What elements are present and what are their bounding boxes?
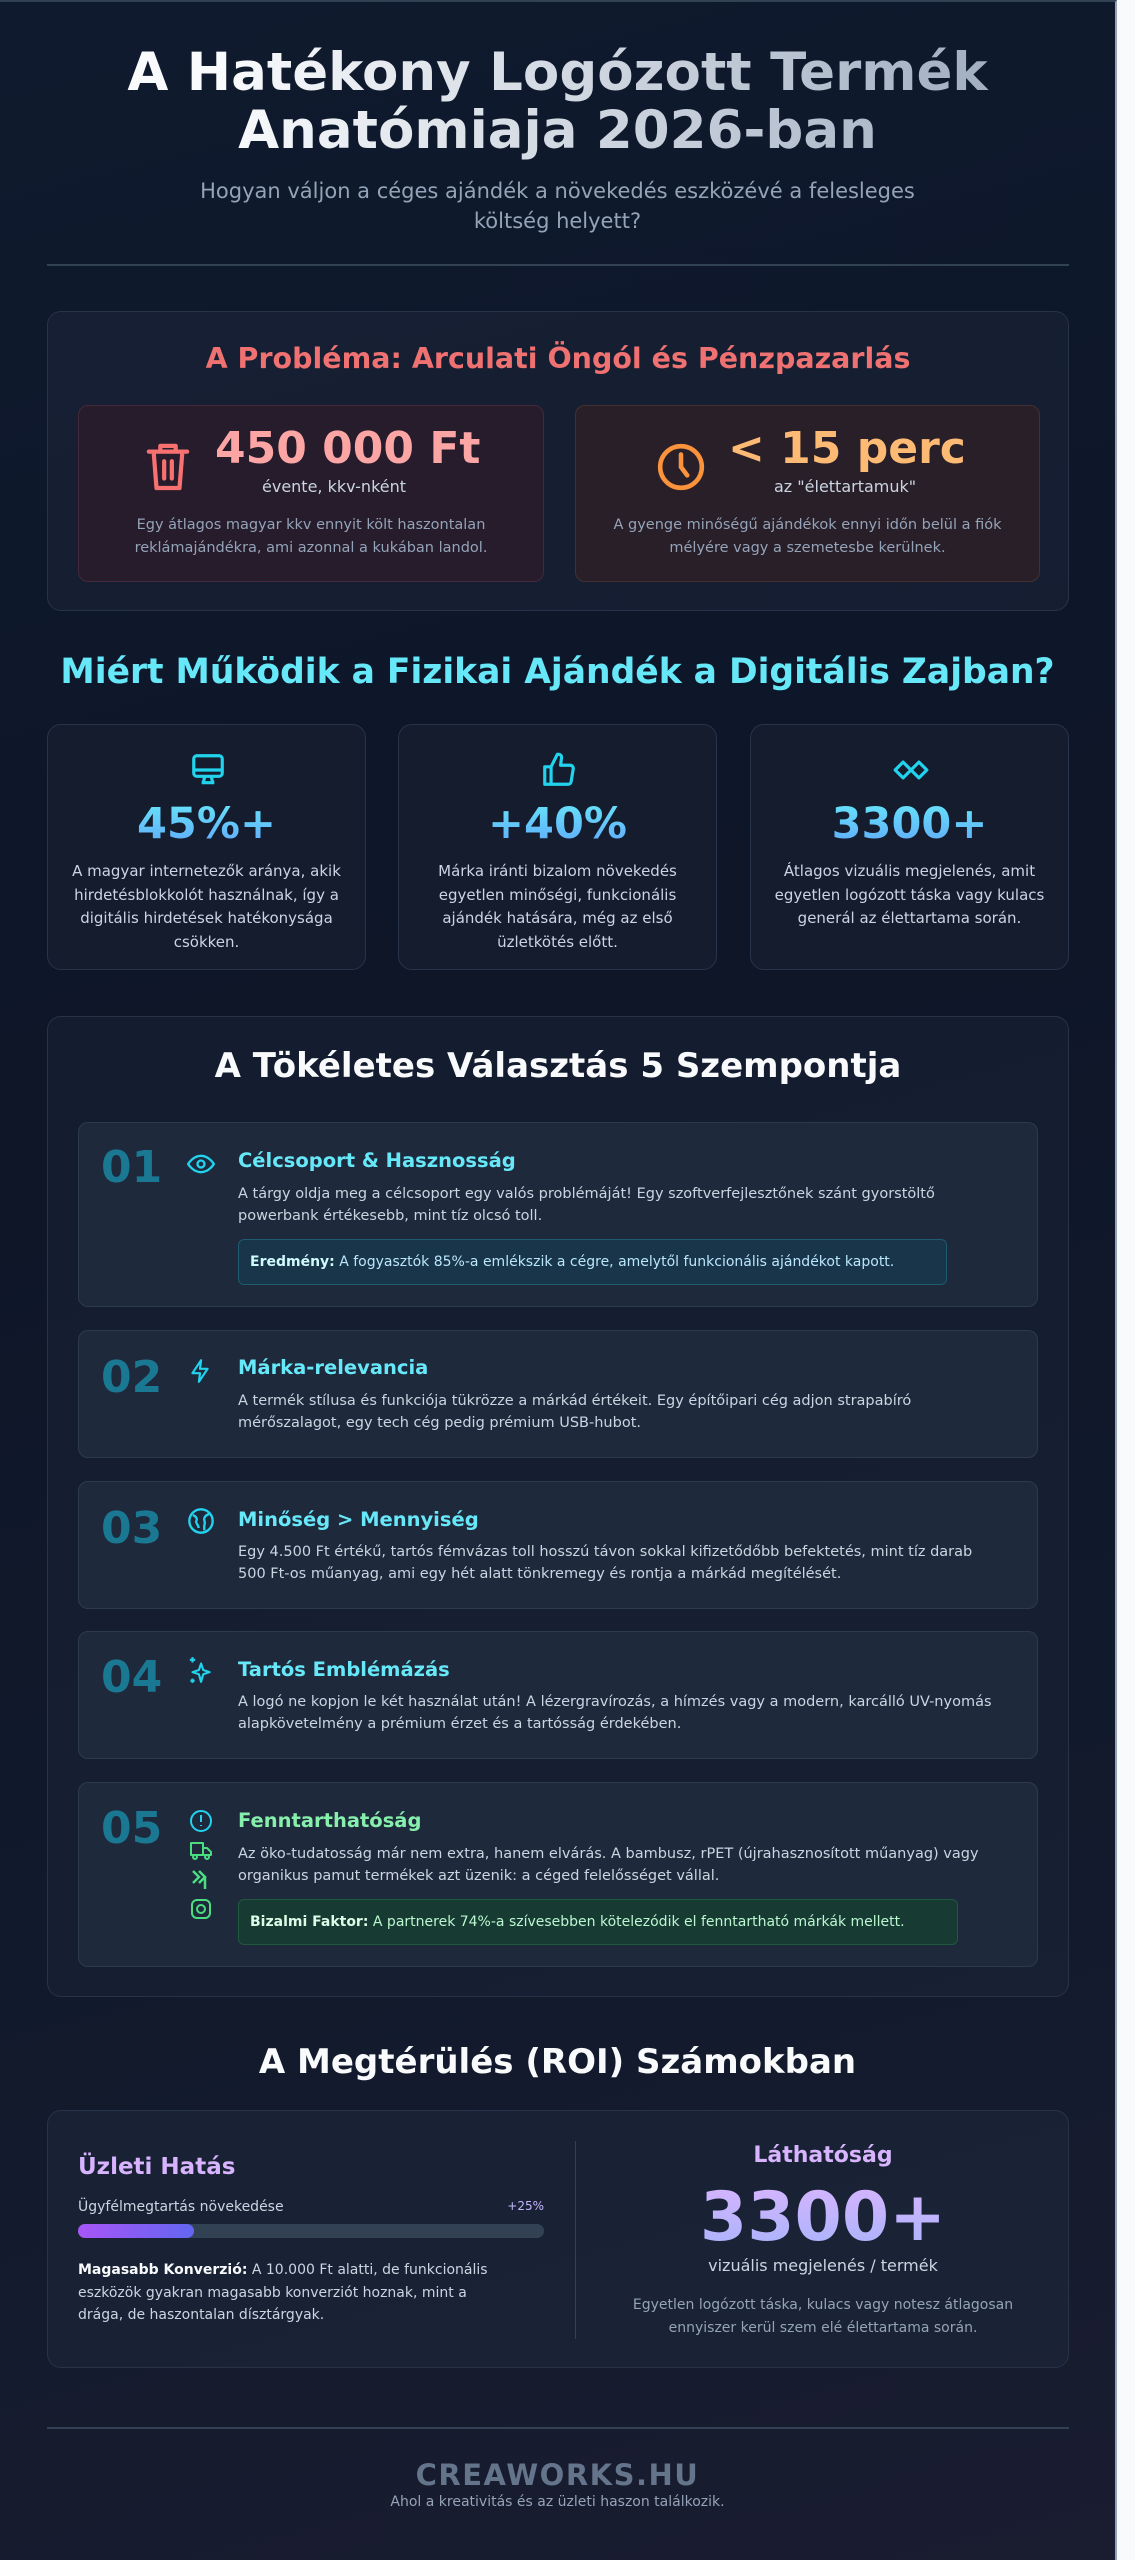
icon: thumbs up xyxy=(543,752,575,786)
item 02 xyxy=(78,1330,1038,1458)
subtitle: Hogyan váljon a céges ajándék a növekedés eszközévé a felesleges költség helyett? xyxy=(200,179,915,233)
criteria heading: A Tökéletes Választás 5 Szempontja xyxy=(215,1046,901,1086)
visibility: vizuális megjelenés / termék xyxy=(708,2256,938,2275)
icon: clock xyxy=(658,444,704,490)
item 03: 03 xyxy=(101,1503,162,1554)
heading: ROI: A Megtérülés (ROI) Számokban xyxy=(259,2042,856,2082)
item 03: Minőség > Mennyiség xyxy=(238,1508,479,1531)
item 04: Tartós Emblémázás xyxy=(238,1658,450,1681)
business impact: Ügyfélmegtartás növekedése xyxy=(78,2199,284,2215)
stat card: 45%: A magyar internetezők aránya, akik hirdetésblokkolót használnak, így a digitális hirdetések hatékonysága csökken. xyxy=(72,862,341,950)
item 05: 05 xyxy=(101,1803,162,1854)
heading: why physical gifts: Miért Működik a Fizikai Ajándék a Digitális Zajban? xyxy=(60,652,1055,692)
icon: sparkles xyxy=(190,1657,211,1683)
stat card: 40% xyxy=(398,724,717,970)
item 05 xyxy=(78,1782,1038,1967)
card: lifespan: az "élettartamuk" xyxy=(774,477,916,496)
item 01 xyxy=(78,1122,1038,1307)
item 02: A termék stílusa és funkciója tükrözze a márkád értékeit. Egy építőipari cég adjon strapabíró mérőszalagot, egy tech cég pedig prémium USB-hubot. xyxy=(238,1393,911,1431)
stat card: 40%: Márka iránti bizalom növekedés egyetlen minőségi, funkcionális ajándék hatására, még az első üzletkötés előtt. xyxy=(438,862,677,950)
progress bar 25% xyxy=(78,2224,544,2238)
stat card: 3300+: Átlagos vizuális megjelenés, amit egyetlen logózott táska vagy kulacs generál az élettartama során. xyxy=(775,862,1044,927)
description: Egy átlagos magyar kkv ennyit költ haszontalan reklámajándékra, ami azonnal a kukában landol. xyxy=(135,517,487,556)
item 05: Az öko-tudatosság már nem extra, hanem elvárás. A bambusz, rPET (újrahasznosított műanyag) vagy organikus pamut termékek azt üzenik: a céged felelősséget vállal. xyxy=(238,1846,979,1884)
title xyxy=(0,44,1115,160)
card: cost: évente, kkv-nként xyxy=(262,477,406,496)
business impact: Üzleti Hatás xyxy=(78,2154,235,2180)
item 01: Célcsoport & Hasznosság xyxy=(238,1149,516,1172)
title: Anatómiaja 2026-ban xyxy=(238,100,877,161)
item 03: Egy 4.500 Ft értékű, tartós fémvázas toll hosszú távon sokkal kifizetődőbb befektetés, mint tíz darab 500 Ft-os műanyag, ami egy hét alatt tönkremegy és rontja a márkád megítélését. xyxy=(238,1544,972,1582)
item 01: 01 xyxy=(101,1142,162,1193)
footer tagline: Ahol a kreativitás és az üzleti haszon találkozik. xyxy=(390,2494,725,2510)
stat: 450 000 Ft: 450 000 Ft xyxy=(215,423,480,474)
footer brand: CREAWORKS.HU xyxy=(416,2458,699,2492)
callout: trust factor: Bizalmi Faktor: A partnerek 74%-a szívesebben kötelezódik el fenntartható márkák mellett. xyxy=(250,1914,905,1930)
business impact: Magasabb Konverzió: A 10.000 Ft alatti, de funkcionális eszközök gyakran magasabb konverziót hoznak, mint a drága, de haszontalan dísztárgyak. xyxy=(78,2262,488,2323)
visibility: 3300+ xyxy=(700,2178,946,2257)
problem heading: A Probléma: Arculati Öngól és Pénzpazarlás xyxy=(206,342,910,375)
stat card: 40%: +40% xyxy=(488,799,627,849)
item 04: A logó ne kopjon le két használat után! A lézergravírozás, a hímzés vagy a modern, karcálló UV-nyomás alapkövetelmény a prémium érzet és a tartósság érdekében. xyxy=(238,1694,992,1732)
icon: monitor xyxy=(192,754,224,784)
item 01: A tárgy oldja meg a célcsoport egy valós problémáját! Egy szoftverfejlesztőnek szánt gyorstöltő powerbank értékesebb, mint tíz olcsó toll. xyxy=(238,1186,935,1224)
item 03 xyxy=(78,1481,1038,1609)
icon: lightning xyxy=(191,1359,209,1383)
icon: globe xyxy=(188,1508,214,1534)
stat card: 45%: 45%+ xyxy=(137,799,276,849)
item 04: 04 xyxy=(101,1652,162,1703)
visibility: Egyetlen logózott táska, kulacs vagy notesz átlagosan ennyiszer kerül szem elé élettartama során. xyxy=(633,2297,1013,2336)
business impact: +25% xyxy=(507,2199,544,2213)
icons: sustainability stack xyxy=(190,1810,212,1919)
stat card: 45% xyxy=(47,724,366,970)
stat card: 3300+: 3300+ xyxy=(832,799,987,849)
description: A gyenge minőségű ajándékok ennyi időn belül a fiók mélyére vagy a szemetesbe kerülnek. xyxy=(613,517,1002,556)
callout: result: Eredmény: A fogyasztók 85%-a emlékszik a cégre, amelytől funkcionális ajándékot kapott. xyxy=(250,1254,894,1270)
item 02: Márka-relevancia xyxy=(238,1356,428,1379)
callout: result xyxy=(238,1239,947,1285)
panel: ROI xyxy=(47,2110,1069,2368)
icon: trash xyxy=(146,444,190,490)
stat: < 15 perc: < 15 perc xyxy=(728,423,966,474)
item 02: 02 xyxy=(101,1352,162,1403)
icon: eye xyxy=(187,1154,215,1174)
callout: trust factor xyxy=(238,1899,958,1945)
card: cost xyxy=(78,405,544,582)
stat card: 3300+ xyxy=(750,724,1069,970)
icon: infinity xyxy=(894,760,928,780)
card: lifespan xyxy=(575,405,1040,582)
visibility xyxy=(633,2143,1013,2336)
title: A Hatékony Logózott Termék xyxy=(127,42,988,103)
business impact xyxy=(78,2152,544,2323)
item 04 xyxy=(78,1631,1038,1759)
visibility: Láthatóság xyxy=(753,2143,893,2168)
panel: problem xyxy=(47,311,1069,611)
item 05: Fenntarthatóság xyxy=(238,1809,421,1832)
panel: 5 criteria xyxy=(47,1016,1069,1997)
